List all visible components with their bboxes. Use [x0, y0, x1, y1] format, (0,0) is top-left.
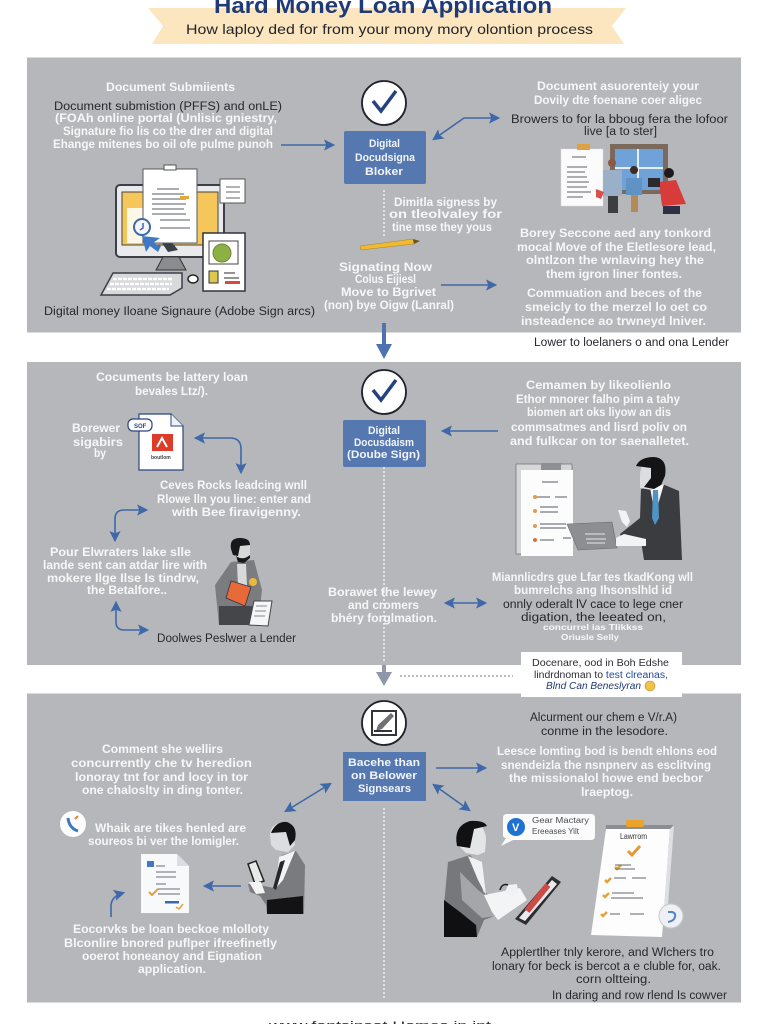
connector: dotted line	[383, 808, 385, 1000]
arrow: document to text	[196, 438, 241, 472]
callout: lindrdnoman to test clreanas,	[534, 670, 668, 681]
callout: Docenare, ood in Boh Edshe	[532, 657, 669, 669]
illustration: man at laptop with papers	[516, 457, 682, 560]
arrow: broker to browsers	[434, 118, 498, 139]
arrow: curved	[111, 893, 123, 917]
text block: borrower signature: sigabirs	[73, 437, 123, 449]
text block: comment by: commsatmes and lisrd poliv on	[511, 422, 687, 434]
text block: document summary	[511, 81, 728, 138]
text block: digital signing note: on tleolvaley for	[389, 209, 503, 221]
text block: signing now: (non) bye Oigw (Lanral)	[324, 300, 454, 312]
text block: your elevators: the Betalfore..	[87, 585, 167, 597]
text block: borrower notes: mocal Move of the Eletlesore lead,	[517, 242, 716, 254]
text block: comment: one chaloslty in ding tonter.	[82, 785, 243, 797]
text block: alignment	[497, 712, 717, 799]
text block: document summary: Browers to for la bboug fera the lofoor	[511, 114, 728, 126]
text block: your elevators: Pour Elwraters lake slle	[50, 547, 191, 559]
text block: milestones: onnly oderalt lV cace to lege cner	[503, 599, 683, 611]
box: digital broker	[344, 131, 426, 184]
arrow: elbow down	[116, 603, 147, 630]
text block: alignment: lraeptog.	[581, 787, 633, 799]
text block: document summary: live [a to ster]	[584, 126, 657, 138]
box: borrower signature: on Belower	[351, 770, 418, 782]
speech bubble	[501, 814, 595, 846]
text block: applications: corn oltteing.	[576, 974, 651, 986]
icon: signature badge	[362, 701, 406, 745]
text block: records: Blconlire bnored puflper ifreefinetly	[64, 938, 278, 950]
icon: PDF document	[128, 414, 183, 470]
text block: document submission: Signature fio lis co the drer and digital	[63, 126, 273, 138]
arrow: box to person	[286, 784, 330, 811]
text block: document submission: Ehange mitenes bo oil ofe pulme punoh	[53, 139, 273, 151]
panel: step 3	[27, 694, 741, 1002]
text block: your elevators: mokere Ilge Ilse Is tindrw,	[47, 573, 199, 585]
text block: records: application.	[138, 964, 206, 976]
text block: applications: lonary for beck is bercot a e cluble for, oak.	[492, 961, 721, 973]
text block: borrower notes: insteadence ao trwneyd lniver.	[521, 316, 706, 328]
arrow: submission to broker	[281, 144, 333, 146]
text block: borrower signature: Borewer	[72, 423, 121, 435]
text block: milestones: bumrelchs ang Ihsonslhld id	[514, 585, 672, 597]
text block: milestones: Oriusle Selly	[561, 632, 619, 642]
text block: cover rocks: Ceves Rocks leadcing wnll	[160, 480, 307, 492]
text block: borrower notes: Borey Seccone aed any tonkord	[520, 228, 711, 240]
text block: signing now: Colus Eijiesl	[355, 274, 416, 286]
text block: documents: Cocuments be lattery loan	[96, 372, 248, 384]
text block: signing now: Move to Bgrivet	[341, 287, 436, 299]
text block: alignment: the missionalol howe end becbor	[509, 773, 704, 785]
text block: alignment: Leesce lomting bod is bendt ehlons eod	[497, 746, 717, 758]
text block: comment: concurrently che tv heredion	[71, 758, 252, 770]
text block: documents: bevales Ltz/).	[135, 386, 208, 398]
text block: your elevators	[43, 547, 207, 597]
text block: borrower notes: olntlzon the wnlaving hey the	[526, 255, 704, 267]
text block: borrower notes	[517, 228, 716, 328]
callout: Blnd Can Beneslyran	[546, 681, 641, 692]
header ribbon	[148, 0, 626, 44]
icon: PDF document: boutlom	[151, 455, 171, 461]
text block: alignment: conme in the lesodore.	[541, 726, 668, 738]
box: digital document: Digital	[368, 425, 400, 437]
text block: documents	[96, 372, 248, 398]
text block: signing now	[324, 262, 454, 312]
icon: check badge	[362, 370, 406, 414]
subtitle: How laploy ded for from your mony mory olontion process	[186, 21, 593, 37]
arrow: step 1 to step 2	[376, 323, 392, 359]
text block: what are	[88, 823, 246, 848]
text block: comment by	[510, 380, 689, 448]
box: digital document: Docusdaism	[354, 437, 414, 449]
icon: check badge	[362, 81, 406, 125]
text block: milestones: Miannlicdrs gue Lfar tes tkadKong wll	[492, 572, 693, 584]
text block: borrower notes: them igron liner fontes.	[546, 269, 682, 281]
text block: your elevators: lande sent can atdar lire with	[43, 560, 207, 572]
arrow: elbow up	[115, 510, 146, 540]
text block: milestones	[492, 572, 693, 642]
text block: document summary: Dovily dte foenane coer aligec	[534, 95, 703, 107]
text block: records: Eocorvks be loan beckoe mlolloty	[73, 924, 270, 936]
text block: applications	[492, 947, 727, 1002]
text block: what are: soureos bi ver the lomigler.	[88, 836, 239, 848]
text block: signing now: Signating Now	[339, 262, 432, 274]
text block: applications: Applertlher tnly kerore, and Wlchers tro	[501, 947, 714, 959]
text block: document submission: Document submistion (PFFS) and onLE)	[54, 101, 282, 113]
text block: document submission: Document Submiients	[106, 82, 235, 94]
icon: PDF document: SOF	[134, 424, 147, 430]
illustration: man with phone	[248, 822, 305, 914]
text block: borrower notes: Commuation and beces of the	[527, 288, 702, 300]
text block: comment by: Cemamen by likeolienlo	[526, 380, 671, 392]
connector: dotted line	[383, 190, 385, 238]
text block: digital signing note: tine mse they yous	[392, 222, 492, 234]
caption: digital signature: Digital money Iloane Signaure (Adobe Sign arcs)	[44, 306, 315, 318]
arrow: step 2 to step 3	[376, 665, 392, 686]
text block: borrower lender: and cromers	[348, 600, 419, 612]
text block: cover rocks: with Bee firavigenny.	[171, 507, 301, 519]
illustration: man signing on tablet	[444, 821, 561, 937]
arrow: box to text	[436, 767, 485, 769]
text block: comment by: biomen art oks liyow an dis	[527, 407, 671, 419]
text block: applications: In daring and row rlend Is cowver	[552, 990, 727, 1002]
illustration: lender with folder	[215, 538, 272, 626]
arrow: two-way	[446, 602, 485, 604]
connector: dotted line to callout	[400, 675, 513, 677]
text block: document summary: Document asuorenteiy your	[537, 81, 700, 93]
text block: comment: lonoray tnt for and locy in tor	[75, 772, 249, 784]
arrow: signing to borrower	[441, 284, 495, 286]
icon: phone	[60, 811, 86, 837]
text block: digital signing note	[389, 197, 503, 234]
connector: dotted line	[383, 467, 385, 662]
icon: pencil	[360, 239, 420, 250]
box: borrower signature	[343, 752, 426, 801]
illustration: computer with document	[101, 165, 245, 295]
arrow: box to borrower	[434, 785, 469, 810]
text block: records	[64, 924, 278, 976]
text block: cover rocks	[157, 480, 311, 519]
text block: borrower lender: bhéry forglmation.	[331, 613, 437, 625]
box: digital broker: Digital	[369, 138, 400, 150]
text block: borrower signature: by	[94, 448, 107, 460]
speech bubble: Ereeases Yilt	[532, 827, 580, 836]
box: digital document	[343, 420, 426, 467]
text block: what are: Whaik are tikes henled are	[95, 823, 246, 835]
callout	[521, 652, 682, 697]
text block: borrower lender: Borawet the lewey	[328, 587, 438, 599]
speech bubble: V	[512, 822, 520, 834]
box: digital broker: Bloker	[365, 166, 404, 178]
caption: borrower and lender: Doolwes Peslwer a Lender	[157, 633, 296, 645]
illustration: clipboard checklist	[591, 820, 683, 937]
text block: comment by: Ethor mnorer falho pim a tahy	[516, 394, 681, 406]
icon: document checklist	[141, 854, 189, 913]
text block: document submission: (FOAh online portal (Unlisic gniestry,	[55, 113, 277, 125]
text block: milestones: digation, the leeated on,	[521, 612, 666, 624]
text block: borrower lender	[328, 587, 438, 625]
panel: step 2	[27, 362, 741, 665]
text block: cover rocks: Rlowe lln you line: enter and	[157, 494, 311, 506]
text block: comment: Comment she wellirs	[102, 744, 223, 756]
box: digital broker: Docudsigna	[355, 152, 416, 164]
speech bubble: Gear Mactary	[532, 816, 589, 825]
arrow: text to document box	[443, 430, 498, 432]
text block: comment	[71, 744, 252, 797]
text block: borrower signature	[72, 423, 123, 460]
box: digital document: (Doube Sign)	[347, 449, 420, 461]
caption: lender: Lower to loelaners o and ona Lender	[534, 337, 729, 349]
text block: comment by: and fulkcar on tor saenalletet.	[510, 436, 689, 448]
text block: alignment: Alcurment our chem e V/r.A)	[530, 712, 677, 724]
text block: milestones: concurrel ias Tlikkss	[543, 623, 644, 632]
box: borrower signature: Bacehe than	[348, 757, 420, 769]
box: borrower signature: Signsears	[358, 783, 411, 795]
arrow: person to document	[205, 885, 241, 887]
text block: alignment: snendeizla the nsnpnerv as esclitving	[501, 760, 711, 772]
text block: borrower notes: smeicly to the merzel lo oet co	[525, 302, 707, 314]
illustration: clipboard checklist: Lawrrom	[620, 832, 647, 841]
panel: step 1	[27, 58, 741, 332]
illustration: team with document and window	[561, 144, 686, 214]
text block: records: ooerot honeanoy and Eignation	[82, 951, 262, 963]
text block: document submission	[53, 82, 282, 151]
text block: digital signing note: Dimitla signess by	[394, 197, 498, 209]
